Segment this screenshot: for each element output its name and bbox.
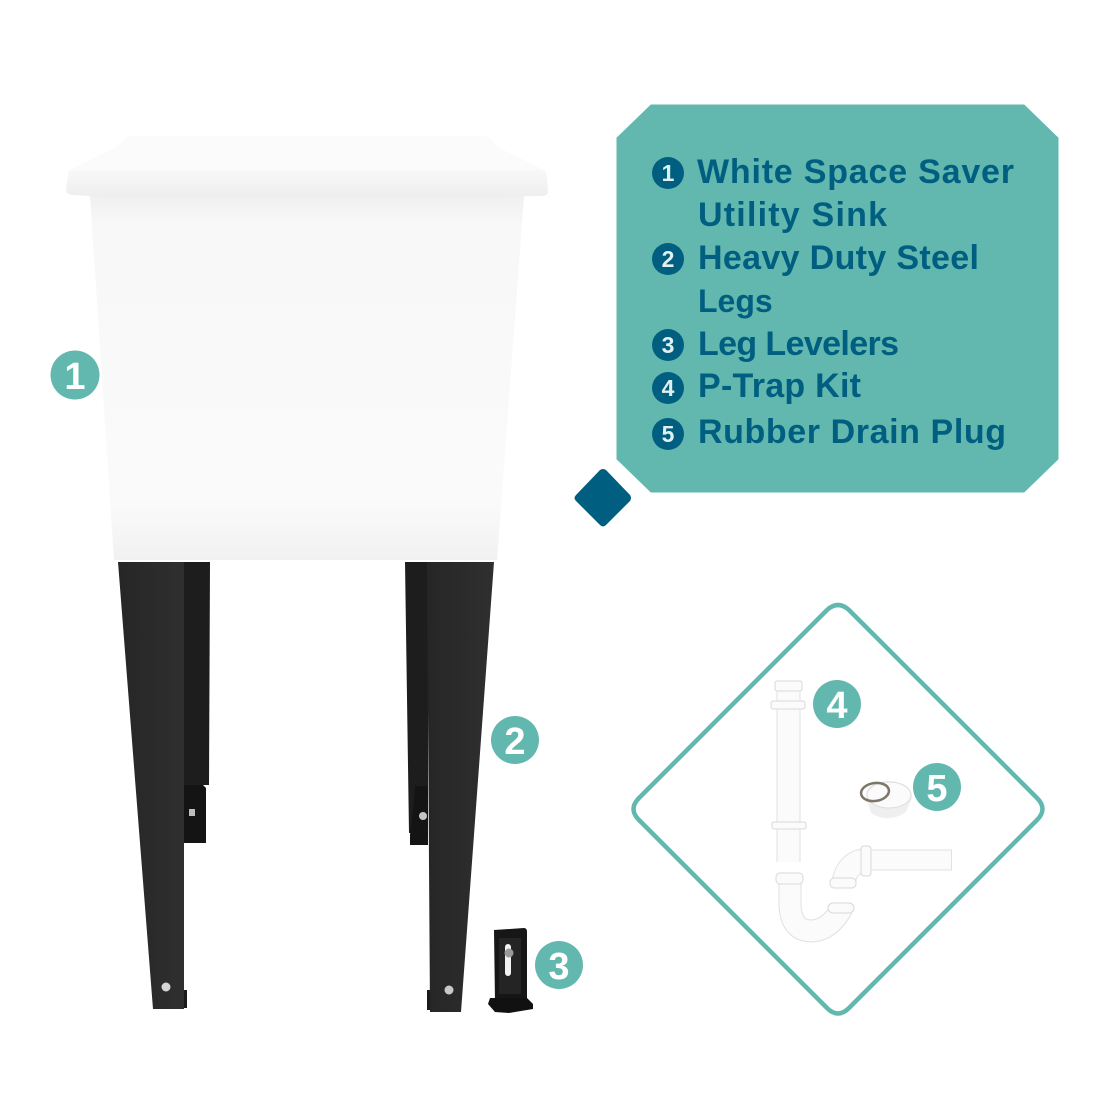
list item 2: Legs — [698, 283, 773, 319]
tube collars — [771, 681, 806, 829]
left leg rear section — [180, 562, 210, 785]
list item 5: 5 — [662, 421, 675, 447]
left leg lower bolt — [162, 982, 170, 992]
sink basin body — [90, 196, 524, 560]
right leg rear section — [405, 562, 428, 833]
list item 4: P-Trap Kit — [698, 367, 861, 405]
elbow — [843, 860, 866, 885]
right leg front panel — [427, 562, 494, 1012]
badge 1: 1 — [64, 356, 86, 398]
list item 1: White Space Saver — [697, 153, 1014, 191]
plug ring — [860, 781, 890, 803]
rubber drain plug illustration — [860, 781, 912, 818]
right leg foot tab — [427, 990, 432, 1010]
list item 2: 2 — [662, 246, 674, 272]
left leg foot tab — [182, 990, 187, 1008]
plug top — [867, 782, 911, 808]
list item 1 — [652, 153, 1014, 234]
leveler bolt — [504, 948, 514, 958]
P-trap kit illustration — [771, 681, 952, 931]
list item 3: 3 — [662, 332, 674, 358]
badge 5 — [913, 763, 961, 811]
list item 5: Rubber Drain Plug — [698, 413, 1006, 451]
right leg lower bolt — [444, 986, 454, 994]
list item 1: Utility Sink — [698, 196, 887, 234]
left leg bolt — [189, 809, 195, 816]
badge 4 — [813, 680, 861, 728]
right leg bracket — [410, 786, 428, 845]
J-bend collars — [776, 873, 854, 913]
teal chamfered panel — [617, 105, 1058, 492]
list item 3: Leg Levelers — [698, 325, 899, 363]
vertical tube — [776, 684, 800, 862]
leveler base — [488, 998, 533, 1013]
left steel leg — [118, 562, 210, 1009]
tail pipe — [868, 850, 952, 870]
left leg bracket — [184, 785, 206, 843]
dark blue diamond accent — [574, 469, 631, 526]
badge 1 — [50, 350, 100, 400]
sink top inner lip — [70, 136, 544, 170]
list item 2: Heavy Duty Steel — [698, 239, 979, 277]
badge 3: 3 — [548, 946, 570, 988]
leveler slot — [505, 944, 511, 976]
badge 4: 4 — [826, 685, 848, 727]
list item 2 — [652, 239, 979, 319]
right leg bolt — [419, 812, 427, 820]
number badges on product — [50, 350, 583, 989]
leveler inner channel — [499, 938, 521, 994]
sink rim — [66, 170, 548, 197]
badge 2 — [491, 716, 539, 764]
elbow collars — [830, 846, 871, 888]
plug body — [866, 781, 912, 818]
list item 1: 1 — [662, 160, 675, 186]
J-bend trap — [790, 880, 842, 931]
leveler back plate — [494, 928, 527, 1002]
accessory badges — [813, 680, 961, 811]
panel: parts list — [617, 105, 1058, 492]
sink product illustration — [66, 136, 548, 1012]
left leg front panel — [118, 562, 184, 1009]
accessories diamond frame — [634, 605, 1042, 1014]
badge 2: 2 — [504, 721, 526, 763]
leg leveler part — [488, 928, 533, 1013]
right steel leg — [405, 562, 494, 1012]
list item 4: 4 — [662, 375, 675, 401]
badge 3 — [535, 941, 583, 989]
badge 5: 5 — [926, 768, 948, 810]
